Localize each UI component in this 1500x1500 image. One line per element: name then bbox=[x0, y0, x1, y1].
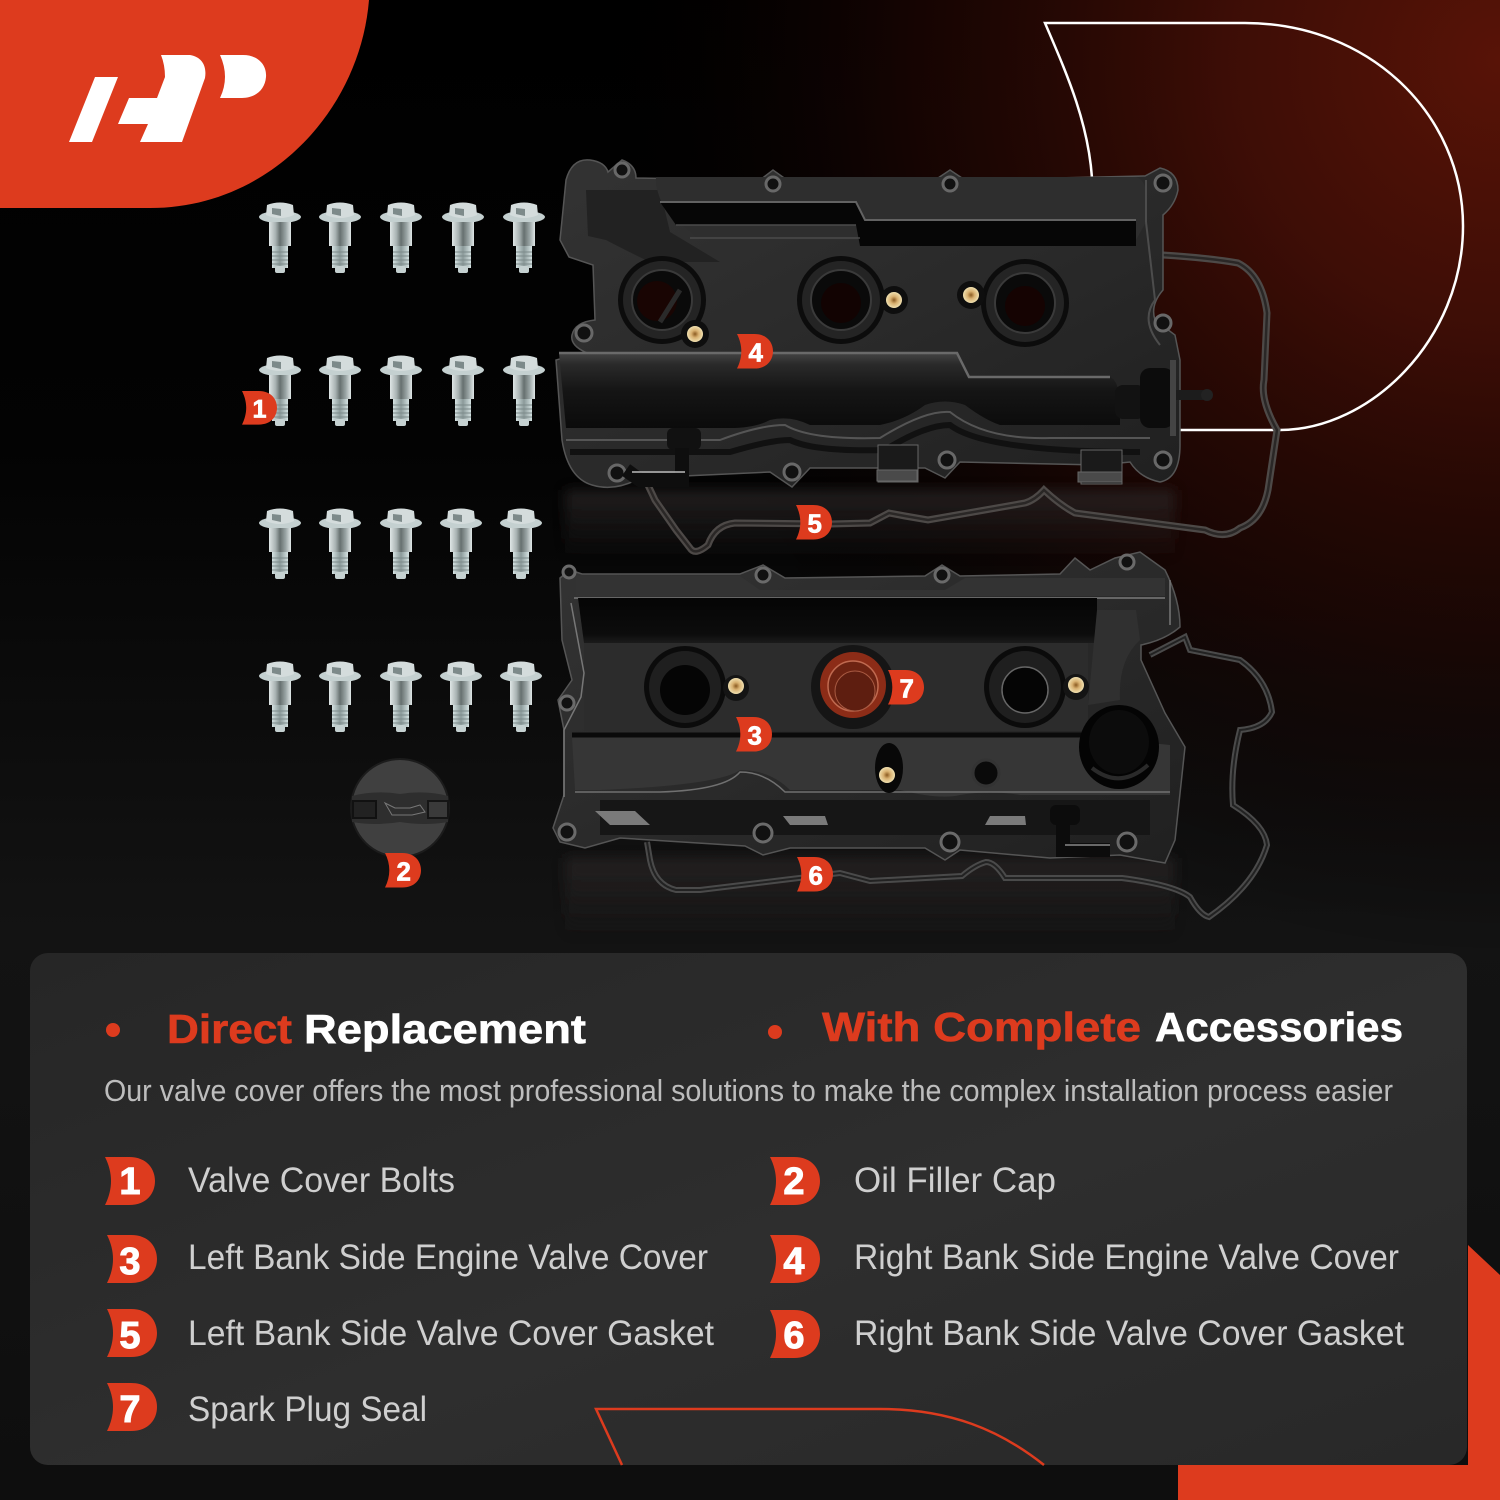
heading: with complete accessories: With Complete bbox=[822, 1004, 1141, 1050]
bottom valve cover (item 3) bbox=[553, 552, 1185, 863]
middle seal highlighted bbox=[811, 645, 895, 729]
item 2: Oil Filler Cap bbox=[854, 1161, 1056, 1200]
decorative orange corner bbox=[1178, 1245, 1500, 1500]
panel accent line bbox=[596, 1409, 1044, 1465]
badge 2: 2 bbox=[397, 858, 411, 886]
item 3: 3 bbox=[119, 1241, 141, 1283]
body silhouette bbox=[553, 552, 1185, 863]
side block bbox=[1088, 610, 1140, 705]
heading: direct replacement bbox=[106, 1006, 586, 1052]
right breather connector bbox=[1115, 360, 1213, 436]
item 4: Right Bank Side Engine Valve Cover bbox=[854, 1238, 1399, 1277]
heading: direct replacement: Replacement bbox=[304, 1006, 586, 1052]
item 7: 7 bbox=[119, 1389, 141, 1431]
seal hole middle bbox=[797, 256, 885, 344]
parts list left column bbox=[105, 1157, 714, 1431]
badge 7: 7 bbox=[900, 675, 914, 703]
badge 6: 6 bbox=[809, 862, 823, 890]
item 5: Left Bank Side Valve Cover Gasket bbox=[188, 1314, 714, 1353]
item 1: Valve Cover Bolts bbox=[188, 1161, 455, 1200]
badge 2 bbox=[385, 853, 421, 888]
clips bbox=[877, 445, 1122, 484]
top ridge bbox=[576, 576, 1165, 596]
right seal bbox=[984, 646, 1066, 728]
oil port sensors bbox=[875, 743, 999, 793]
L-shaped hose connector bbox=[1050, 805, 1110, 850]
info panel bbox=[30, 953, 1467, 1465]
mounting ears bbox=[559, 555, 1136, 851]
heading: with complete accessories bbox=[768, 1004, 1403, 1050]
item 6: 6 bbox=[783, 1315, 805, 1357]
heading: with complete accessories: Accessories bbox=[1155, 1004, 1403, 1050]
badge 4 bbox=[737, 334, 773, 369]
badge 5 bbox=[796, 505, 832, 540]
item 7: Spark Plug Seal bbox=[188, 1390, 427, 1429]
badge 3: 3 bbox=[748, 722, 762, 750]
badge 4: 4 bbox=[749, 339, 764, 367]
brass inserts bbox=[723, 674, 1089, 701]
left recess bbox=[586, 190, 720, 262]
item 4 bbox=[770, 1235, 1399, 1283]
photo badges bbox=[242, 334, 924, 892]
large oil filler opening bbox=[1079, 705, 1159, 789]
mid panel bbox=[584, 643, 1088, 731]
badge 7 bbox=[888, 670, 924, 705]
item 5: 5 bbox=[119, 1315, 141, 1357]
item 1: 1 bbox=[119, 1161, 141, 1203]
lower bar bbox=[559, 353, 1120, 428]
brass inserts bbox=[681, 281, 985, 348]
item 5 bbox=[107, 1309, 714, 1357]
parts list right column bbox=[770, 1157, 1404, 1358]
bolts: four rows of five bbox=[259, 202, 545, 732]
L-shaped hose connector bbox=[626, 428, 701, 480]
badge 6 bbox=[797, 857, 833, 892]
clips bbox=[595, 811, 1026, 825]
item 2: 2 bbox=[783, 1161, 805, 1203]
mounting ears bbox=[576, 163, 1171, 481]
item 2 bbox=[770, 1157, 1056, 1205]
white outline arc bbox=[1045, 23, 1463, 430]
item 6: Right Bank Side Valve Cover Gasket bbox=[854, 1314, 1404, 1353]
badge 3 bbox=[736, 717, 772, 752]
badge 5: 5 bbox=[808, 510, 822, 538]
lower bar bbox=[572, 737, 1170, 797]
seal hole right bbox=[981, 259, 1069, 347]
left seal bbox=[644, 646, 726, 728]
item 6 bbox=[770, 1310, 1404, 1358]
gasket: left bank (item 5) bbox=[647, 255, 1277, 551]
logo corner shape bbox=[0, 0, 369, 208]
badge 1 bbox=[242, 391, 277, 425]
oil filler cap (item 2) bbox=[351, 759, 449, 857]
upper ridge bbox=[656, 177, 1146, 240]
heading: direct replacement: Direct bbox=[167, 1006, 292, 1052]
item 1 bbox=[105, 1157, 455, 1205]
badge 1: 1 bbox=[252, 396, 267, 424]
seal hole left bbox=[618, 256, 706, 344]
dark channel bbox=[578, 598, 1097, 643]
reflection of covers bbox=[565, 490, 1175, 938]
body silhouette bbox=[556, 160, 1180, 487]
item 3: Left Bank Side Engine Valve Cover bbox=[188, 1238, 708, 1277]
item 4: 4 bbox=[783, 1241, 805, 1283]
item 3 bbox=[107, 1235, 708, 1283]
top valve cover (item 4) bbox=[556, 160, 1213, 487]
gasket: right bank (item 6) bbox=[647, 637, 1272, 917]
logo mark bbox=[69, 55, 266, 142]
item 7 bbox=[107, 1383, 427, 1431]
description text: Our valve cover offers the most professional solutions to make the complex installation process easier bbox=[104, 1073, 1393, 1108]
